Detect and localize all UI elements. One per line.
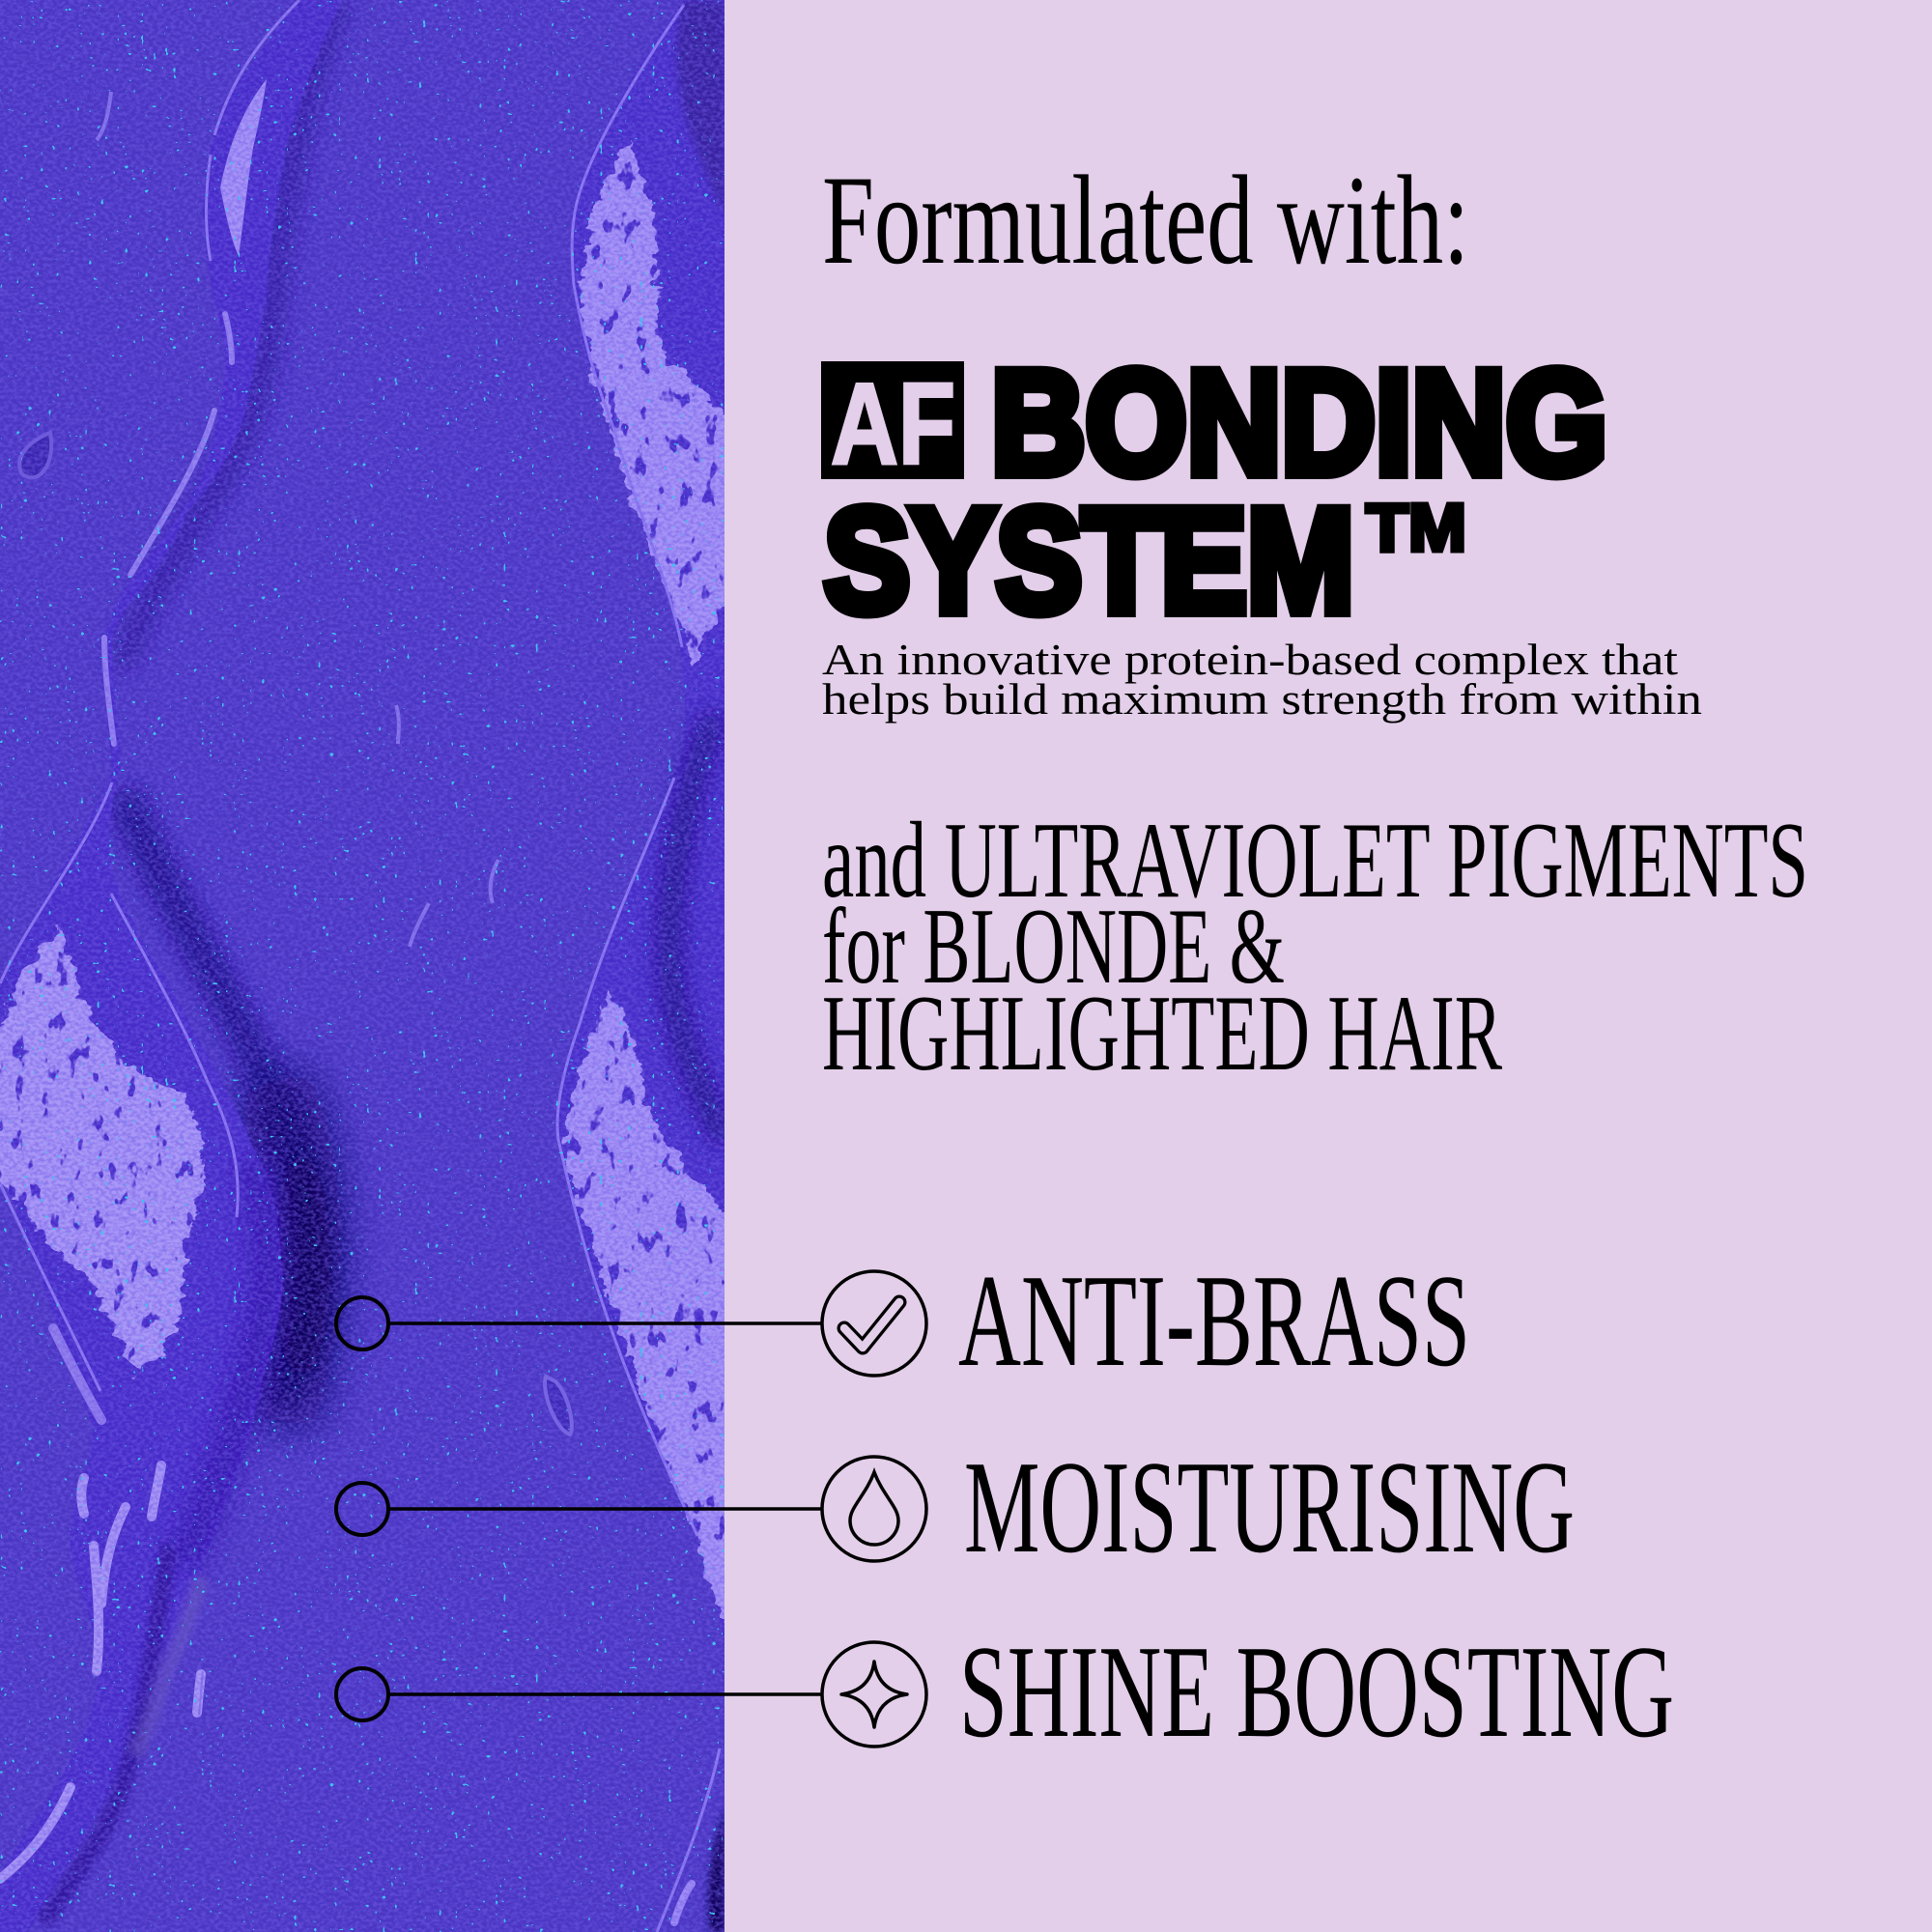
shadow: right edge middle [669, 715, 724, 1140]
benefit: shine boosting [336, 1618, 1674, 1765]
texture: cyan glitter [0, 0, 724, 1932]
highlight: lower twist patches [0, 1465, 201, 1879]
highlight: upper ribbon slivers [104, 314, 232, 744]
description text: helps build maximum strength from within [822, 675, 1702, 724]
shadow: right edge top [676, 0, 724, 217]
subheading: ultraviolet pigments: for BLONDE & [822, 887, 1285, 1007]
callout marker [336, 1483, 388, 1535]
shadow: right edge bottom [708, 1806, 724, 1932]
icon: check mark [822, 1271, 926, 1376]
connector line [389, 1321, 821, 1325]
wordmark: system: SYSTEM [824, 478, 1354, 643]
highlight: thin ribbon edge lines [0, 0, 720, 1932]
swirl: rim shading on ribbon [184, 1159, 269, 1565]
wordmark: trademark: TM [1366, 490, 1466, 565]
benefit: moisturising [336, 1434, 1575, 1580]
shadow: upper crease beside lower left swirl [124, 792, 280, 1111]
callout marker [336, 1668, 388, 1720]
photo panel: purple cream texture [0, 0, 734, 1932]
benefit: anti-brass [336, 1247, 1470, 1394]
texture: paint grain [0, 0, 724, 1932]
heading: formulated with: Formulated with: [822, 149, 1469, 291]
swirl: muted fold [135, 1577, 201, 1755]
wordmark: bonding: BONDING [991, 340, 1607, 505]
shadow: crease beside upper ribbon [122, 0, 338, 667]
logo: AF bonding system [821, 340, 1607, 643]
highlight: bottom right glint [674, 1884, 692, 1922]
shadow: middle crease [270, 1082, 302, 1420]
highlight: right ribbon top sheen [581, 138, 734, 666]
blemish: small cream marks [19, 92, 572, 1715]
icon: sparkle [822, 1642, 926, 1747]
connector line [389, 1692, 821, 1696]
description text: An innovative protein-based complex that [822, 636, 1679, 684]
connector line [389, 1507, 821, 1511]
highlight: lower left swirl sheen [0, 923, 206, 1377]
highlight: lower left sliver [53, 1328, 101, 1420]
swirl: upper ribbon body [103, 0, 342, 773]
swirl: lower left ribbon body [0, 773, 283, 1932]
subheading: ultraviolet pigments: HIGHLIGHTED HAIR [822, 974, 1502, 1094]
label: MOISTURISING [964, 1434, 1575, 1580]
icon: water drop [822, 1457, 926, 1561]
highlight: upper ribbon sheen [220, 79, 267, 256]
callout marker [336, 1297, 388, 1350]
shadow: dark core of crease [272, 1154, 330, 1377]
logo badge: AF: AF [831, 359, 955, 489]
swirl: lower shadow fold [43, 1546, 169, 1922]
highlight: right ribbon lower sheen [562, 993, 734, 1642]
subheading: ultraviolet pigments [822, 801, 1808, 1094]
swirl: right ribbon body [557, 0, 724, 1642]
description text [822, 636, 1702, 724]
label: ANTI-BRASS [958, 1247, 1470, 1394]
